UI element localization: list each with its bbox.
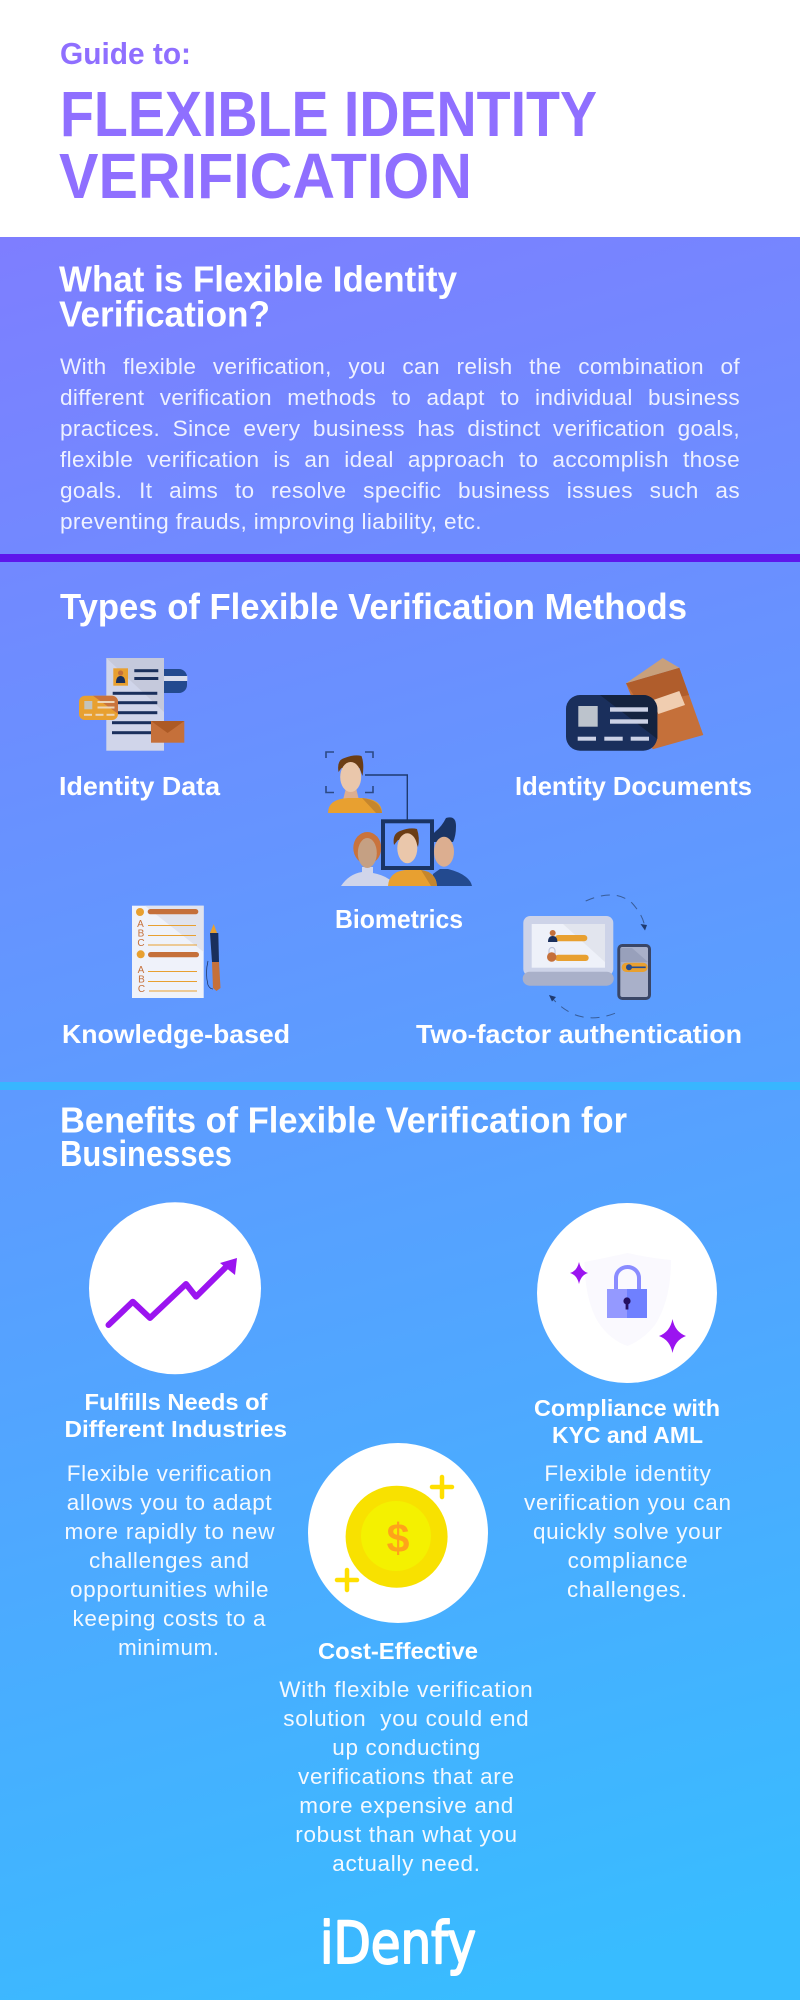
heading: benefits: Businesses <box>60 1133 232 1174</box>
label: Cost-Effective <box>318 1638 478 1664</box>
text block: definition paragraph: preventing frauds, improving liability, etc. <box>60 509 482 534</box>
heading: types: Types of Flexible Verification Methods <box>60 586 687 627</box>
text block: minimum. <box>118 1635 219 1660</box>
text block: allows you to adapt <box>67 1490 272 1515</box>
heading: benefits <box>60 1100 627 1174</box>
text block: more expensive and <box>299 1793 513 1818</box>
text block <box>64 1461 275 1660</box>
label: Compliance with <box>534 1395 720 1421</box>
heading: what is: What is Flexible Identity <box>59 258 457 300</box>
icon: identity documents <box>566 658 703 751</box>
text block: With flexible verification <box>279 1677 533 1702</box>
icon: knowledge-based quiz sheet: C <box>137 938 145 949</box>
icon: knowledge-based quiz sheet: C <box>138 984 145 995</box>
icon: coin in circle <box>308 1443 488 1623</box>
text block: definition paragraph: flexible verification is an ideal approach to accomplish those <box>60 447 740 472</box>
text block: definition paragraph: goals. It aims to resolve specific business issues such as <box>60 478 740 503</box>
text block <box>524 1461 731 1602</box>
icon: growth arrow in circle <box>89 1202 261 1374</box>
text block: compliance <box>568 1548 688 1573</box>
panel: benefits of flexible verification <box>60 1100 731 1876</box>
text block: Flexible verification <box>67 1461 272 1486</box>
label: Fulfills Needs of <box>84 1389 268 1415</box>
heading: what is: Verification? <box>59 294 270 334</box>
text block: quickly solve your <box>533 1519 722 1544</box>
heading: benefits: Benefits of Flexible Verification for <box>60 1100 627 1141</box>
text block: definition paragraph: different verification methods to adapt to individual business <box>60 385 740 410</box>
logo: iDenfy: iDenfy <box>320 1909 476 1977</box>
icon: knowledge-based quiz sheet: B <box>138 974 145 986</box>
text block: more rapidly to new <box>64 1519 275 1544</box>
text block: challenges. <box>567 1577 687 1602</box>
text block: keeping costs to a <box>72 1606 266 1631</box>
icon: knowledge-based quiz sheet: B <box>138 928 145 940</box>
text block: robust than what you <box>295 1822 517 1847</box>
label: KYC and AML <box>552 1422 703 1448</box>
benefit: cost-effective <box>279 1443 533 1876</box>
heading: what is <box>59 258 457 334</box>
text block: up conducting <box>332 1735 480 1760</box>
text block: verification you can <box>524 1490 731 1515</box>
icon: two-factor authentication <box>523 895 650 1018</box>
text block: solution you could end <box>283 1706 529 1731</box>
benefit: compliance <box>524 1203 731 1602</box>
label: identity data: Identity Data <box>59 771 221 801</box>
panel: types of flexible verification methods <box>59 586 752 1049</box>
icon: biometrics <box>326 752 472 886</box>
title line 2: VERIFICATION <box>59 140 472 212</box>
title line 1: FLEXIBLE IDENTITY <box>60 78 597 150</box>
benefit: fulfills needs <box>64 1202 287 1660</box>
icon: coin in circle: $ <box>387 1515 410 1561</box>
label: Different Industries <box>64 1416 287 1442</box>
icon: padlock in circle <box>537 1203 717 1383</box>
label <box>64 1389 287 1442</box>
kicker: Guide to: Guide to: <box>60 36 191 71</box>
text block: definition paragraph: practices. Since every business has distinct verification goals, <box>60 416 740 441</box>
text block: actually need. <box>332 1851 480 1876</box>
text block: challenges and <box>89 1548 249 1573</box>
icon: knowledge-based quiz sheet: A <box>137 919 144 930</box>
icon: knowledge-based quiz sheet <box>132 906 220 998</box>
label: identity documents: Identity Documents <box>515 771 752 801</box>
text block <box>279 1677 533 1876</box>
label: biometrics: Biometrics <box>335 904 463 934</box>
icon: knowledge-based quiz sheet: A <box>138 965 145 976</box>
icon: identity data <box>79 658 187 751</box>
label: knowledge-based: Knowledge-based <box>62 1019 290 1049</box>
text block: verifications that are <box>298 1764 514 1789</box>
text block: Flexible identity <box>544 1461 712 1486</box>
header: guide title <box>59 36 597 212</box>
label <box>534 1395 720 1448</box>
label: two-factor authentication: Two-factor authentication <box>416 1019 742 1049</box>
text block: opportunities while <box>70 1577 268 1602</box>
panel: what is flexible identity verification <box>59 258 740 538</box>
text block: definition paragraph: With flexible verification, you can relish the combination of <box>60 354 740 379</box>
text block: definition paragraph <box>60 351 740 538</box>
